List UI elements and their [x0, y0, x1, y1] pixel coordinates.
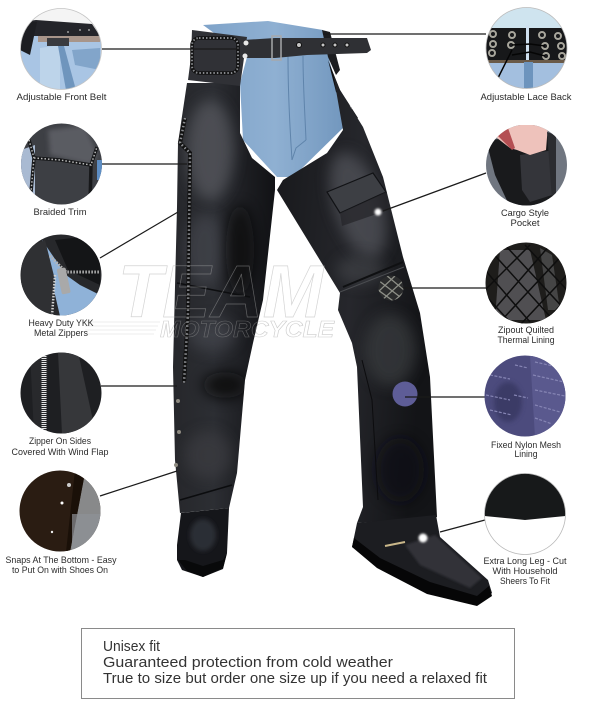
zipout mesh vent: [378, 276, 404, 300]
label: Zipout Quilted: [498, 325, 554, 336]
feature: snaps at the bottom: [6, 470, 117, 576]
label: Cargo Style: [501, 208, 549, 219]
footer note box: True to size but order one size up if you need a relaxed fit: [103, 670, 488, 687]
side braid: [180, 118, 190, 383]
label: Braided Trim: [34, 207, 87, 218]
left boot: [177, 508, 229, 577]
side snaps: [174, 399, 181, 467]
feature: adjustable front belt: [16, 8, 107, 103]
feature: extra long leg: With Household: [492, 566, 558, 577]
feature: snaps at the bottom: to Put On with Shoes On: [12, 565, 108, 576]
product photo: leather chaps: [173, 21, 492, 606]
inner dark opening: [328, 60, 358, 128]
left waistband: [188, 30, 247, 86]
cargo pocket flap: [327, 173, 386, 213]
footer note box: Guaranteed protection from cold weather: [103, 654, 393, 671]
label: Adjustable Front Belt: [16, 92, 107, 103]
feature: adjustable lace back: [480, 7, 572, 103]
boot highlight: [418, 534, 428, 542]
feature: fixed nylon mesh lining: [484, 355, 566, 460]
label: Adjustable Lace Back: [480, 92, 572, 103]
feature: fixed nylon mesh lining: Lining: [514, 449, 538, 460]
feature: zipper on sides: Covered With Wind Flap: [12, 447, 108, 458]
leather highlight cargo: [374, 208, 382, 216]
watermark: Team Motorcycle: MOTORCYCLE: [160, 316, 335, 342]
label: Zipper On Sides: [29, 436, 91, 447]
right boot: [352, 515, 492, 605]
feature: cargo style pocket: Pocket: [510, 218, 540, 229]
label: Extra Long Leg - Cut: [484, 556, 567, 567]
belt: [242, 36, 371, 60]
feature: extra long leg: Sheers To Fit: [500, 576, 550, 587]
label: Snaps At The Bottom - Easy: [6, 555, 117, 566]
nylon mesh vent: [392, 382, 418, 406]
callout lines: [100, 34, 486, 532]
watermark: Team Motorcycle: TEAM: [118, 250, 324, 333]
footer note box: [82, 628, 514, 698]
right waist strip: [322, 30, 340, 75]
right chap leg: [277, 73, 437, 523]
jeans fly stitching: [288, 56, 306, 160]
left chap leg: [173, 83, 275, 513]
feature: cargo style pocket: [486, 125, 568, 229]
feature: extra long leg: [484, 473, 567, 587]
feature: heavy duty YKK metal zippers: Metal Zippers: [34, 328, 88, 339]
feature: zipout quilted thermal lining: Thermal Lining: [498, 335, 554, 346]
label: Heavy Duty YKK: [28, 318, 94, 329]
feature: heavy duty YKK metal zippers: [20, 234, 102, 339]
label: Fixed Nylon Mesh: [491, 440, 561, 451]
feature: zipout quilted thermal lining: [485, 242, 567, 346]
jeans: [203, 21, 347, 177]
feature: zipper on sides: [12, 352, 108, 458]
feature: braided trim: [21, 123, 103, 218]
footer note box: Unisex fit: [103, 638, 161, 655]
